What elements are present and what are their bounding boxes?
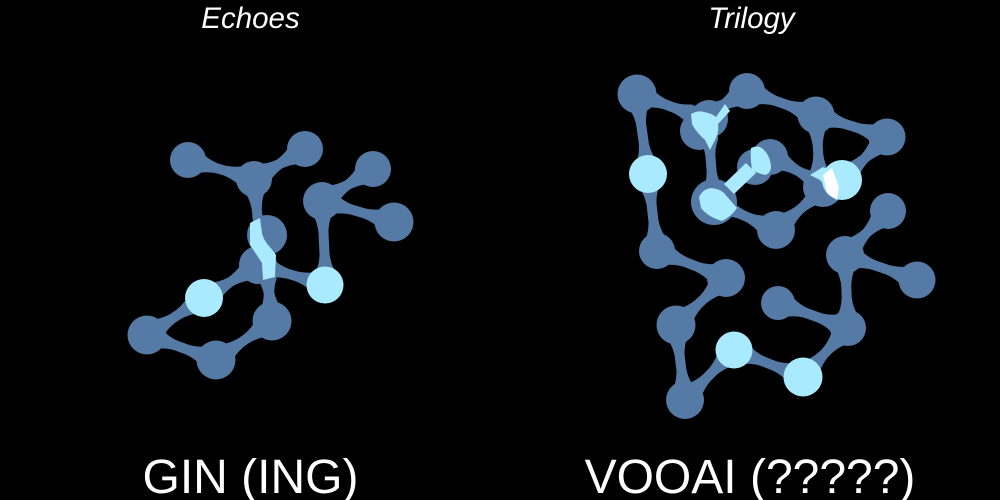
atom: highlighted left bbox=[629, 155, 667, 193]
atom: highlighted left bbox=[185, 279, 223, 317]
atoms: VOOAI molecule bbox=[618, 73, 936, 419]
overlap highlight: central bond bbox=[724, 163, 756, 194]
atoms: GIN molecule bbox=[128, 131, 414, 380]
bonds: VOOAI molecule bbox=[637, 91, 917, 400]
molecule: GIN (ING) bbox=[128, 131, 414, 380]
molecule: VOOAI (?????) bbox=[618, 73, 936, 419]
overlap: white intersection bbox=[823, 168, 839, 200]
overlap highlight: central upper lens bbox=[751, 146, 771, 175]
overlap highlight: upper left pair bbox=[691, 104, 730, 150]
overlap highlight: crossing bond bbox=[250, 218, 276, 280]
bonds: GIN molecule bbox=[147, 149, 394, 360]
title: Trilogy: Trilogy bbox=[708, 2, 797, 35]
atom: highlighted lower left bbox=[716, 332, 752, 368]
title: Echoes: Echoes bbox=[201, 2, 300, 35]
atom: highlighted right bbox=[306, 266, 344, 304]
atom: highlighted right bbox=[822, 160, 862, 200]
atom: highlighted lower right bbox=[784, 358, 822, 396]
overlap highlight: central lower lens bbox=[699, 188, 737, 221]
overlap highlight: right bond bbox=[810, 167, 832, 195]
